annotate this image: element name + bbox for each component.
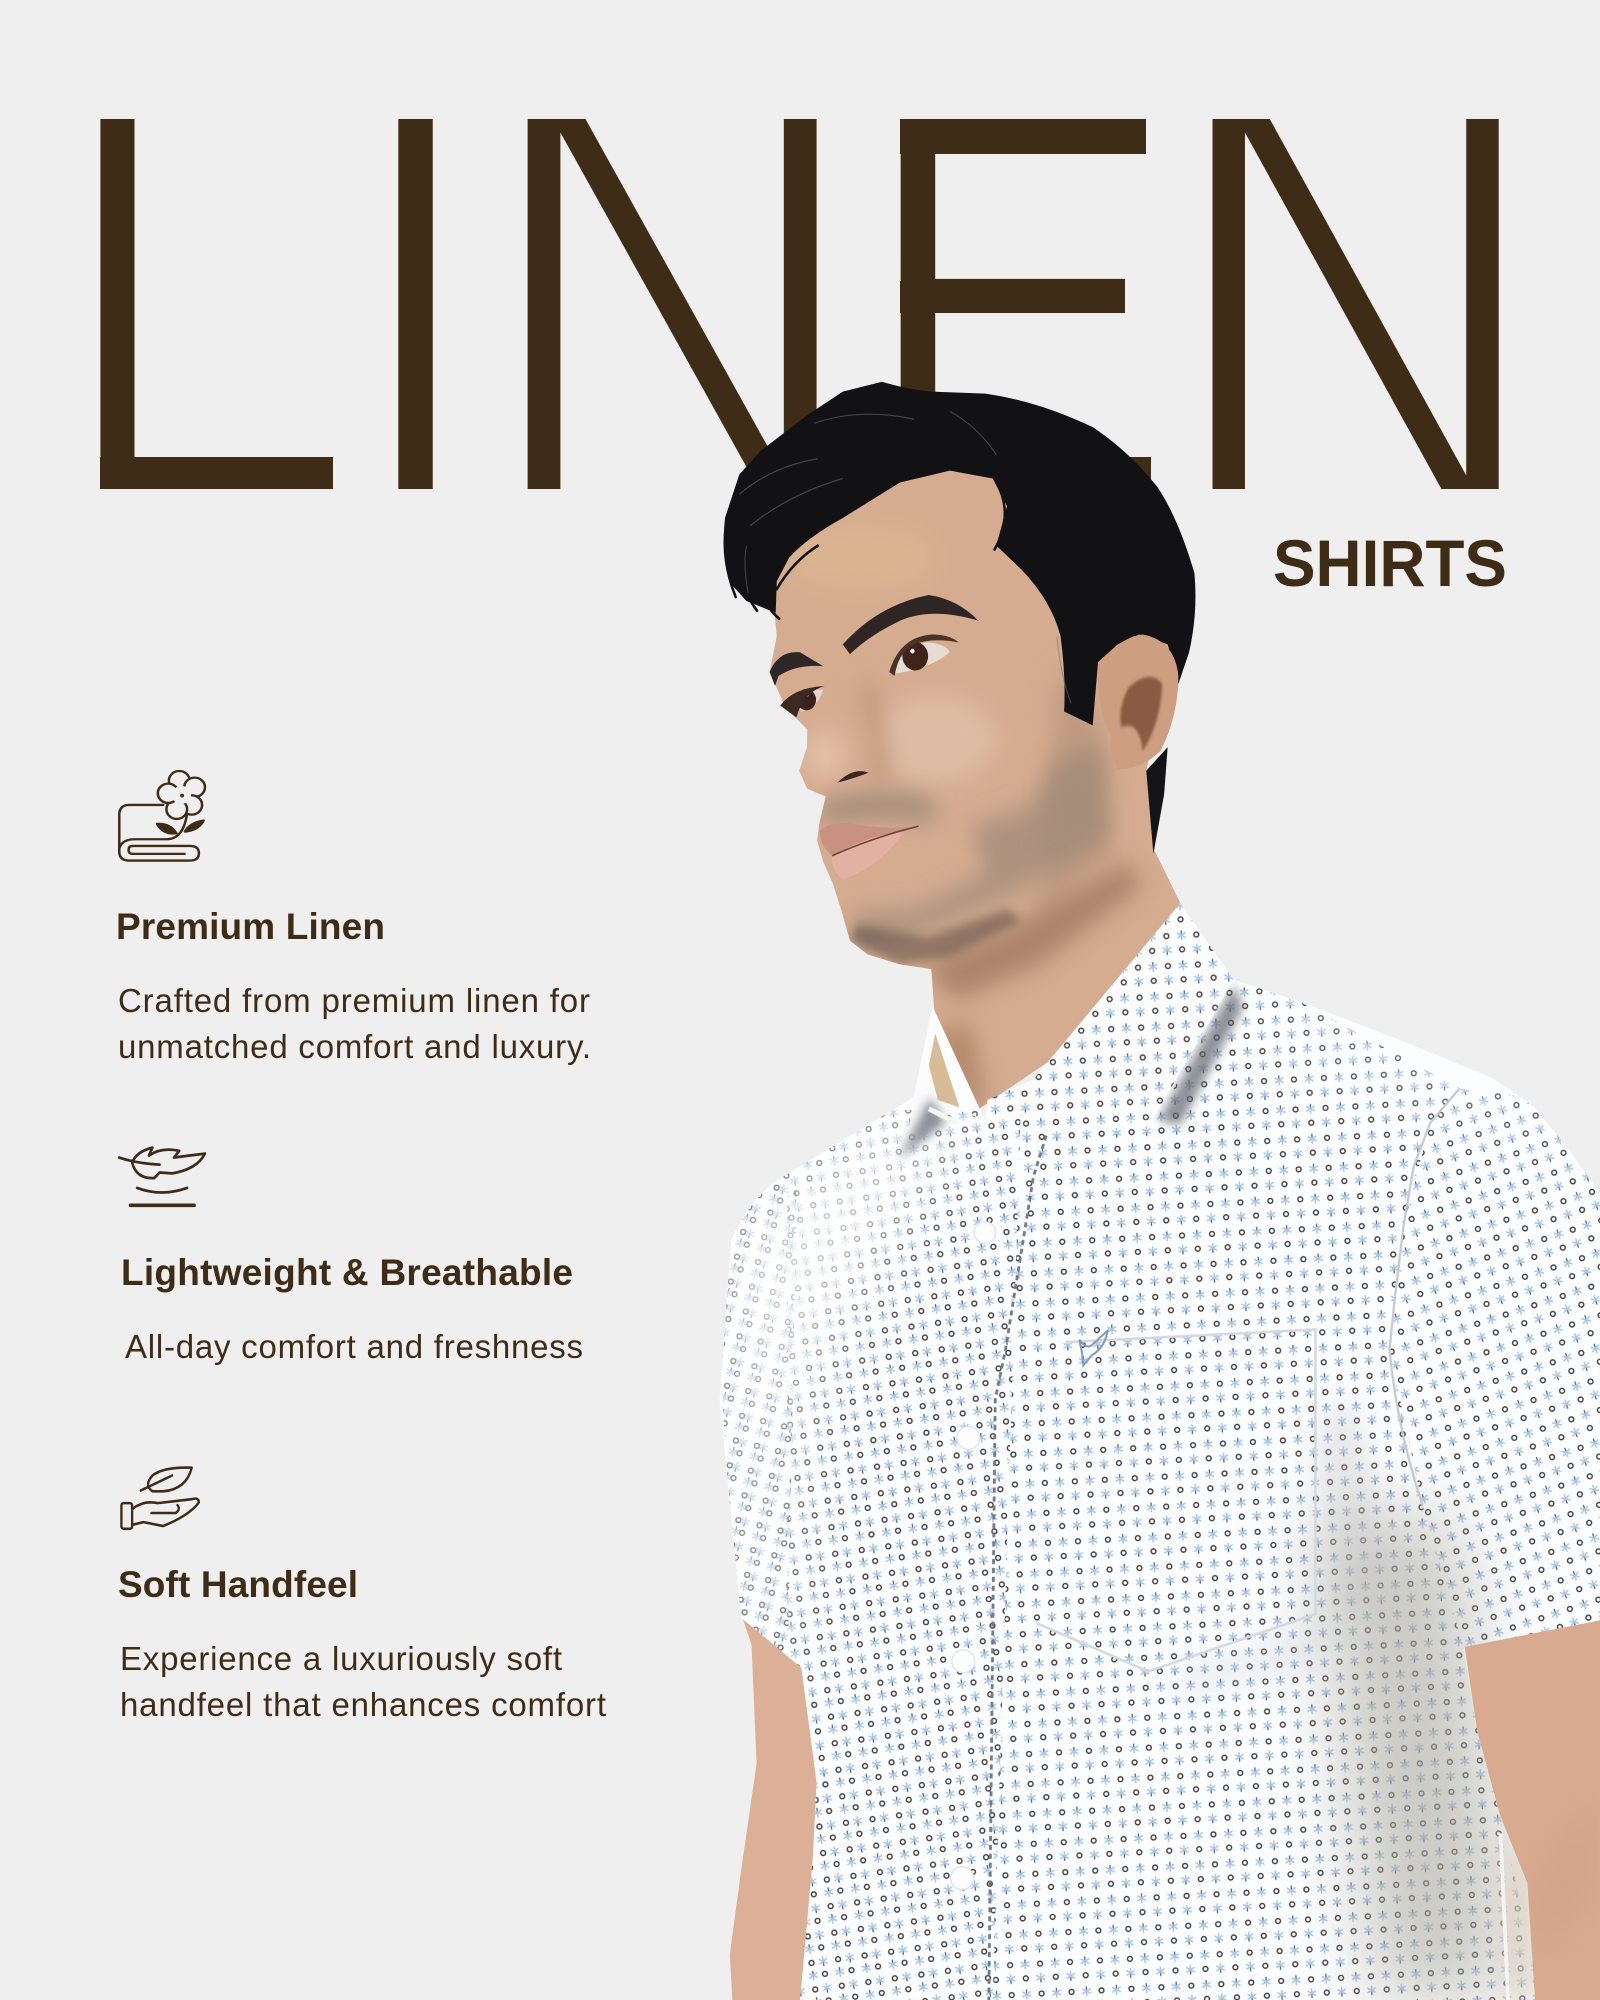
logo: chest emblem xyxy=(1079,1331,1107,1365)
beard shadow xyxy=(821,747,1111,952)
description: Crafted from premium linen for xyxy=(118,982,590,1019)
heading: Soft Handfeel xyxy=(118,1564,358,1605)
description xyxy=(118,982,591,1065)
hair xyxy=(724,382,1195,725)
hair back below ear xyxy=(1146,747,1168,854)
buttons xyxy=(951,1222,996,1890)
icon: hand with leaf xyxy=(121,1468,199,1529)
hair highlights xyxy=(739,411,1071,704)
skin shading xyxy=(782,522,1143,1110)
ear xyxy=(1098,635,1178,769)
feature: soft handfeel xyxy=(118,1468,606,1723)
title: LINEN: L xyxy=(35,2,348,625)
face and neck skin xyxy=(770,419,1180,1110)
neck shadow under jaw xyxy=(921,862,1143,1000)
feature: soft handfeel: handfeel that enhances comfort xyxy=(120,1686,606,1723)
feature: premium linen xyxy=(116,771,591,1065)
print: right sleeve xyxy=(1389,1088,1600,1647)
title: LINEN: E xyxy=(835,3,1191,625)
lips xyxy=(820,823,920,856)
placket and seams xyxy=(989,1088,1508,2000)
side fold xyxy=(1500,1833,1508,2000)
title: LINEN: I xyxy=(333,4,498,626)
icon: towel with flower xyxy=(119,771,205,861)
heading: Premium Linen xyxy=(116,906,385,947)
pocket xyxy=(1036,1329,1315,1671)
photo: man in printed shirt xyxy=(689,382,1600,2000)
title: LINEN xyxy=(35,2,1564,626)
print: front right xyxy=(993,980,1544,2000)
description: Experience a luxuriously soft xyxy=(120,1640,562,1677)
description: All-day comfort and freshness xyxy=(125,1328,583,1365)
arms xyxy=(730,1610,1600,2000)
collar xyxy=(898,903,1243,1160)
hair wisps xyxy=(725,482,1005,619)
eyes xyxy=(891,642,950,674)
title: LINEN: N xyxy=(462,4,882,626)
nose nostril xyxy=(837,771,869,783)
print: front left xyxy=(787,1110,1021,2000)
subtitle: SHIRTS: SHIRTS xyxy=(1273,526,1507,600)
eyebrows xyxy=(843,595,978,654)
description: unmatched comfort and luxury. xyxy=(118,1028,591,1065)
shirt shading xyxy=(715,982,1582,2000)
shirt xyxy=(689,880,1600,2000)
heading: Lightweight & Breathable xyxy=(121,1252,573,1293)
icon: feather xyxy=(119,1148,205,1205)
head xyxy=(724,382,1195,1111)
title: LINEN: N xyxy=(1148,2,1564,625)
feature: lightweight and breathable xyxy=(119,1148,583,1365)
print: left sleeve xyxy=(722,1173,797,1651)
